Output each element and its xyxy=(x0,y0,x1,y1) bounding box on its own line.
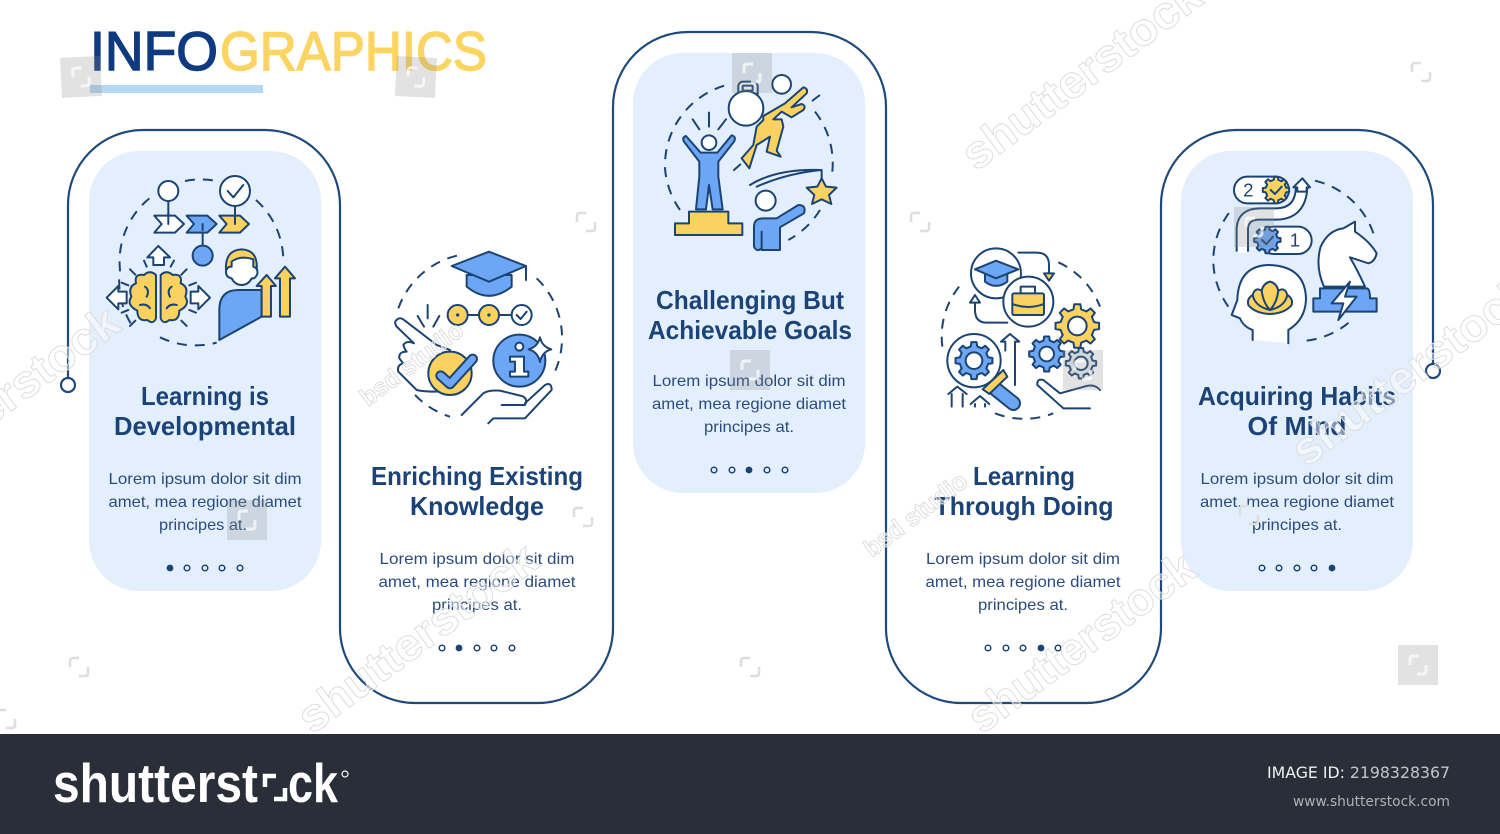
panel: challenging but achievable goals text xyxy=(648,285,852,473)
shutterstock logo: shutterst xyxy=(53,752,258,814)
panel: enriching existing knowledge text: amet, mea regione diamet xyxy=(378,574,576,591)
connecting outline frame xyxy=(61,32,1440,703)
panel: learning through doing text xyxy=(926,461,1121,651)
panel: learning through doing text: principes at. xyxy=(978,597,1068,614)
title xyxy=(90,20,487,93)
icon: acquiring habits of mind xyxy=(1213,177,1377,343)
panel backgrounds xyxy=(89,53,1413,591)
panel: acquiring habits of mind text: Acquiring Habits xyxy=(1198,381,1396,411)
panel: acquiring habits of mind text: Lorem ipsum dolor sit dim xyxy=(1200,471,1394,488)
stock watermarks: shutterstock xyxy=(287,531,547,743)
panel: enriching existing knowledge text: principes at. xyxy=(432,597,522,614)
panel: acquiring habits of mind text: Of Mind xyxy=(1248,411,1346,441)
panel: learning through doing text: Through Doing xyxy=(934,491,1114,521)
panel: learning is developmental text: amet, mea regione diamet xyxy=(108,494,302,511)
panel: challenging but achievable goals text: Challenging But xyxy=(656,285,844,315)
panel: enriching existing knowledge text xyxy=(371,461,583,651)
icon: acquiring habits of mind: 1 xyxy=(1290,230,1300,251)
panel: enriching existing knowledge text: Lorem ipsum dolor sit dim xyxy=(380,551,574,568)
panel: challenging but achievable goals text: Lorem ipsum dolor sit dim xyxy=(652,373,846,390)
title: INFO xyxy=(90,20,218,82)
panel: learning is developmental text: Developmental xyxy=(114,411,296,441)
icon: challenging but achievable goals xyxy=(665,75,837,250)
panel: learning is developmental text: Learning is xyxy=(141,381,269,411)
panel: challenging but achievable goals text: amet, mea regione diamet xyxy=(652,396,847,413)
stock watermarks: bsd studio xyxy=(355,316,469,412)
panel: enriching existing knowledge text: Enriching Existing xyxy=(371,461,583,491)
panel: acquiring habits of mind text: principes at. xyxy=(1252,517,1342,534)
panel: acquiring habits of mind text: amet, mea regione diamet xyxy=(1200,494,1395,511)
panel: learning is developmental text xyxy=(108,381,302,571)
icon: learning is developmental xyxy=(107,176,295,345)
icon: learning through doing xyxy=(942,248,1100,419)
stock watermarks: shutterstock xyxy=(957,540,1205,743)
image id: IMAGE ID: 2198328367 xyxy=(1267,763,1450,782)
panel: learning is developmental text: principes at. xyxy=(159,517,247,534)
icon: enriching existing knowledge xyxy=(395,252,562,423)
panel: learning through doing text: amet, mea regione diamet xyxy=(926,574,1121,591)
panel: acquiring habits of mind text xyxy=(1198,381,1396,571)
icon: acquiring habits of mind: 2 xyxy=(1243,180,1254,201)
panel: learning through doing text: Lorem ipsum dolor sit dim xyxy=(926,551,1120,568)
panel: learning through doing text: Learning xyxy=(973,461,1075,491)
title: GRAPHICS xyxy=(220,20,487,82)
panel: enriching existing knowledge text: Knowledge xyxy=(410,491,544,521)
panel: challenging but achievable goals text: Achievable Goals xyxy=(648,315,852,345)
stock watermarks: bsd studio xyxy=(859,467,973,563)
shutterstock logo: ck xyxy=(288,752,338,814)
panel: learning is developmental text: Lorem ipsum dolor sit dim xyxy=(108,471,302,488)
panel: challenging but achievable goals text: principes at. xyxy=(704,419,794,436)
footer bar xyxy=(0,734,1500,834)
website: www.shutterstock.com xyxy=(1293,794,1450,810)
